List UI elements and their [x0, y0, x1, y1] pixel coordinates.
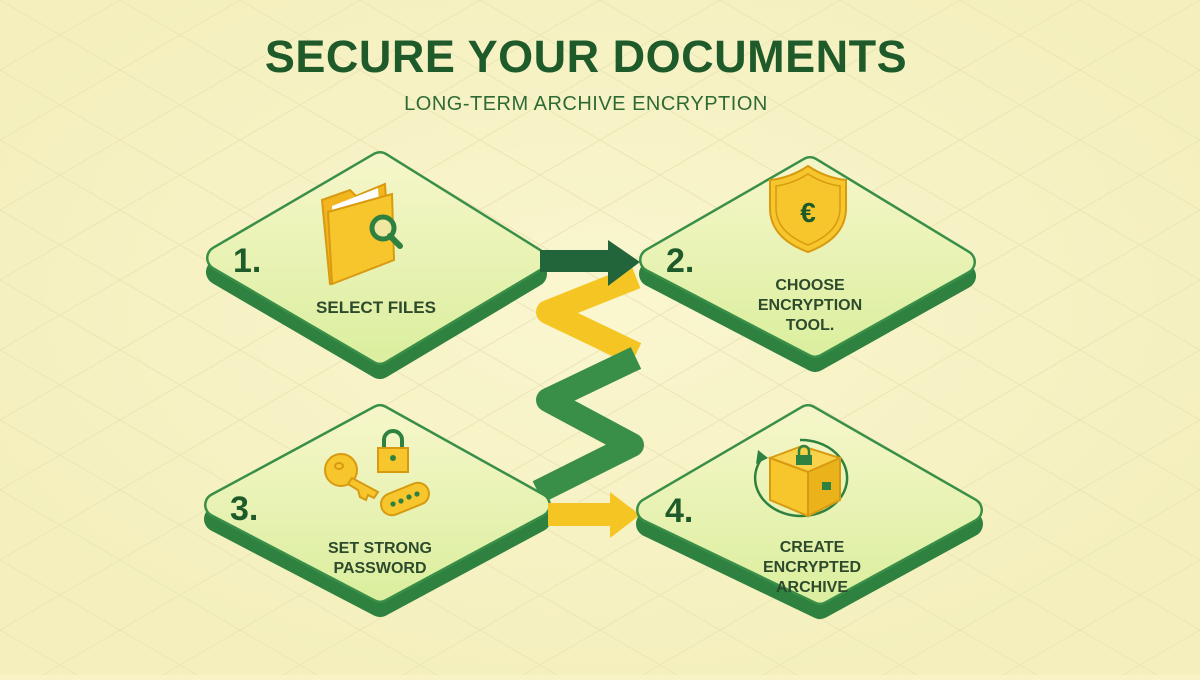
step number 3: 3. — [230, 490, 258, 528]
icon: key, padlock, password — [325, 431, 432, 519]
icon: folder with magnifier — [322, 184, 400, 284]
icon: shield with E: € — [800, 197, 816, 228]
icon: shield with E — [770, 166, 846, 252]
tile 1 — [219, 164, 534, 366]
tile 2 — [652, 166, 963, 359]
step number 1: 1. — [233, 242, 261, 280]
tile 3 — [217, 417, 538, 604]
arrow: dark green 1 to 2 — [540, 240, 640, 286]
label: CHOOSE — [775, 277, 845, 294]
label: SELECT FILES — [316, 298, 436, 317]
icon: locked box with cycle arrow — [755, 440, 847, 516]
arrow: yellow 3 to 4 — [548, 492, 640, 538]
step number 4: 4. — [665, 492, 693, 530]
step number 2: 2. — [666, 242, 694, 280]
tile 4: ARCHIVE — [776, 579, 848, 596]
subtitle: LONG-TERM ARCHIVE ENCRYPTION — [404, 93, 768, 115]
connector: yellow zigzag — [548, 277, 636, 354]
tile 4 — [649, 417, 970, 606]
connector: green zigzag — [538, 358, 636, 492]
tile 2: ENCRYPTION — [758, 297, 862, 314]
title: SECURE YOUR DOCUMENTS — [265, 31, 907, 82]
tile 4: ENCRYPTED — [763, 559, 861, 576]
tile 3: PASSWORD — [333, 560, 427, 577]
label: CREATE — [780, 539, 845, 556]
label: SET STRONG — [328, 540, 432, 557]
tile 2: TOOL. — [786, 317, 834, 334]
